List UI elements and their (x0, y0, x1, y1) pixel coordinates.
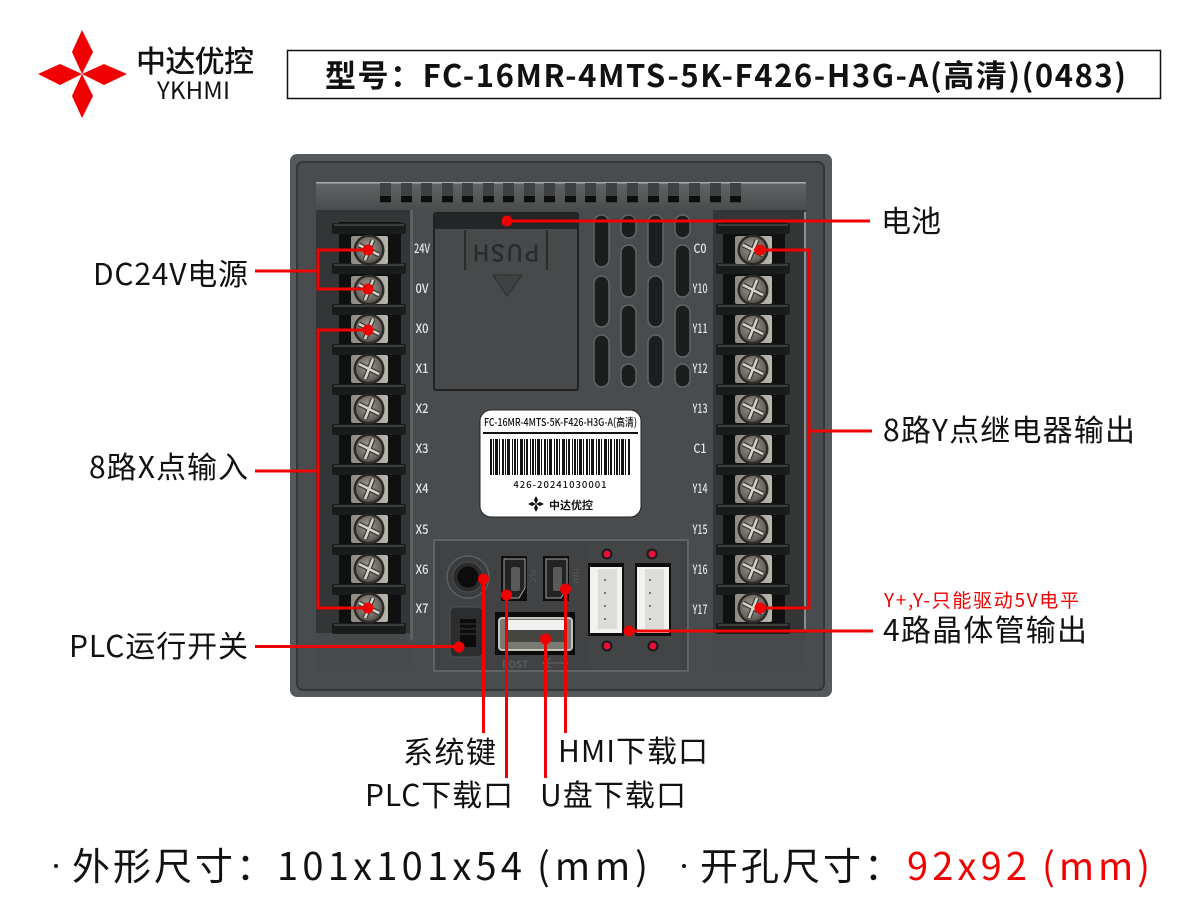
product label (480, 410, 641, 517)
HMI mini USB port (543, 556, 581, 601)
right terminal block (713, 210, 806, 670)
right terminal labels: Y10 (692, 278, 708, 297)
line: U disk port (544, 640, 547, 778)
right terminal labels: C0 (694, 238, 706, 257)
HMI mini USB port: HMI (570, 569, 581, 583)
label: PLC run switch: PLC运行开关 (69, 622, 248, 666)
push label: PUSH (472, 238, 540, 272)
left terminal labels: X3 (416, 438, 428, 457)
cutout size dot (682, 864, 686, 868)
right terminal labels: C1 (694, 438, 706, 457)
label: HMI download: HMI下载口 (558, 727, 708, 771)
left terminal labels: X2 (416, 398, 428, 417)
USB host port (495, 612, 575, 671)
left terminal labels: X1 (416, 358, 428, 377)
line: X inputs (255, 330, 368, 608)
label: system key: 系统键 (403, 728, 496, 772)
bottom dimensions (54, 836, 1150, 891)
logo name: 中达优控 (136, 37, 254, 81)
right terminal labels: Y12 (692, 358, 708, 377)
line: Y outputs (754, 250, 872, 608)
label: 8 X inputs: 8路X点输入 (89, 443, 248, 487)
icon: red four-point logo (38, 30, 127, 118)
logo subtitle: YKHMI (156, 71, 230, 106)
label: 8 Y relay outputs: 8路Y点继电器输出 (883, 406, 1135, 450)
outer size caption: 外形尺寸： (72, 836, 277, 891)
label: USB download: U盘下载口 (540, 771, 686, 815)
line: PLC port (505, 595, 508, 778)
line: system key (482, 579, 485, 733)
right terminal labels: Y14 (692, 478, 708, 497)
line: HMI port (564, 589, 567, 733)
left terminal labels: X7 (416, 598, 428, 617)
outer size dot (54, 864, 58, 868)
right terminal labels: Y16 (692, 559, 708, 578)
panel: device back (290, 154, 832, 697)
label model text: FC-16MR-4MTS-5K-F426-H3G-A(高清) (484, 414, 637, 430)
logo (38, 30, 254, 118)
serial number: 426-20241030001 (513, 477, 608, 491)
port panel (434, 540, 688, 671)
barcode (490, 439, 631, 475)
push arrow (493, 275, 522, 296)
right terminal labels: Y11 (692, 318, 708, 337)
LED indicators (602, 550, 658, 650)
label logo (528, 496, 544, 512)
left terminal labels: X6 (416, 559, 428, 578)
outer size unit: (mm) (537, 836, 648, 891)
model title: 型号：FC-16MR-4MTS-5K-F426-H3G-A(高清)(0483) (325, 51, 1126, 96)
cutout size value: 92x92 (907, 836, 1027, 891)
label: 4 transistor outputs: 4路晶体管输出 (883, 606, 1087, 650)
right terminal labels: Y17 (692, 599, 708, 618)
top vent strip (316, 182, 806, 212)
system key (447, 556, 489, 598)
line: DC24V (255, 250, 368, 289)
label: battery: 电池 (881, 197, 941, 241)
left terminal labels: X4 (416, 478, 428, 497)
USB host port: POST (502, 656, 528, 671)
label brand: 中达优控 (549, 497, 593, 513)
outer size value: 101x101x54 (277, 836, 522, 891)
right terminal labels: Y15 (692, 519, 708, 538)
callout lines (255, 221, 873, 778)
label: red warning: Y+,Y-只能驱动5V电平 (883, 586, 1079, 613)
left terminal labels: 0V (416, 278, 429, 297)
PLC mini USB port: PLC (527, 569, 538, 583)
callout dots (362, 216, 766, 652)
title box (288, 50, 1160, 98)
line: battery (507, 220, 870, 222)
left terminal labels (414, 238, 430, 617)
right terminal labels (692, 238, 708, 618)
line: transistor outputs (629, 630, 873, 632)
line: PLC switch (255, 645, 459, 648)
label: PLC download: PLC下载口 (365, 771, 513, 815)
PLC mini USB port (501, 556, 538, 601)
right terminal labels: Y13 (692, 398, 708, 417)
ventilation slots (594, 215, 690, 387)
battery cover (434, 213, 578, 390)
left terminal labels: X5 (416, 519, 428, 538)
transistor connectors (588, 563, 671, 636)
cutout size unit: (mm) (1042, 836, 1150, 891)
left terminal block (316, 210, 413, 670)
cutout size caption: 开孔尺寸： (700, 836, 905, 891)
label: DC24V power: DC24V电源 (93, 250, 248, 294)
left terminal labels: 24V (414, 238, 430, 257)
PLC switch (450, 607, 483, 657)
left terminal labels: X0 (416, 318, 428, 337)
